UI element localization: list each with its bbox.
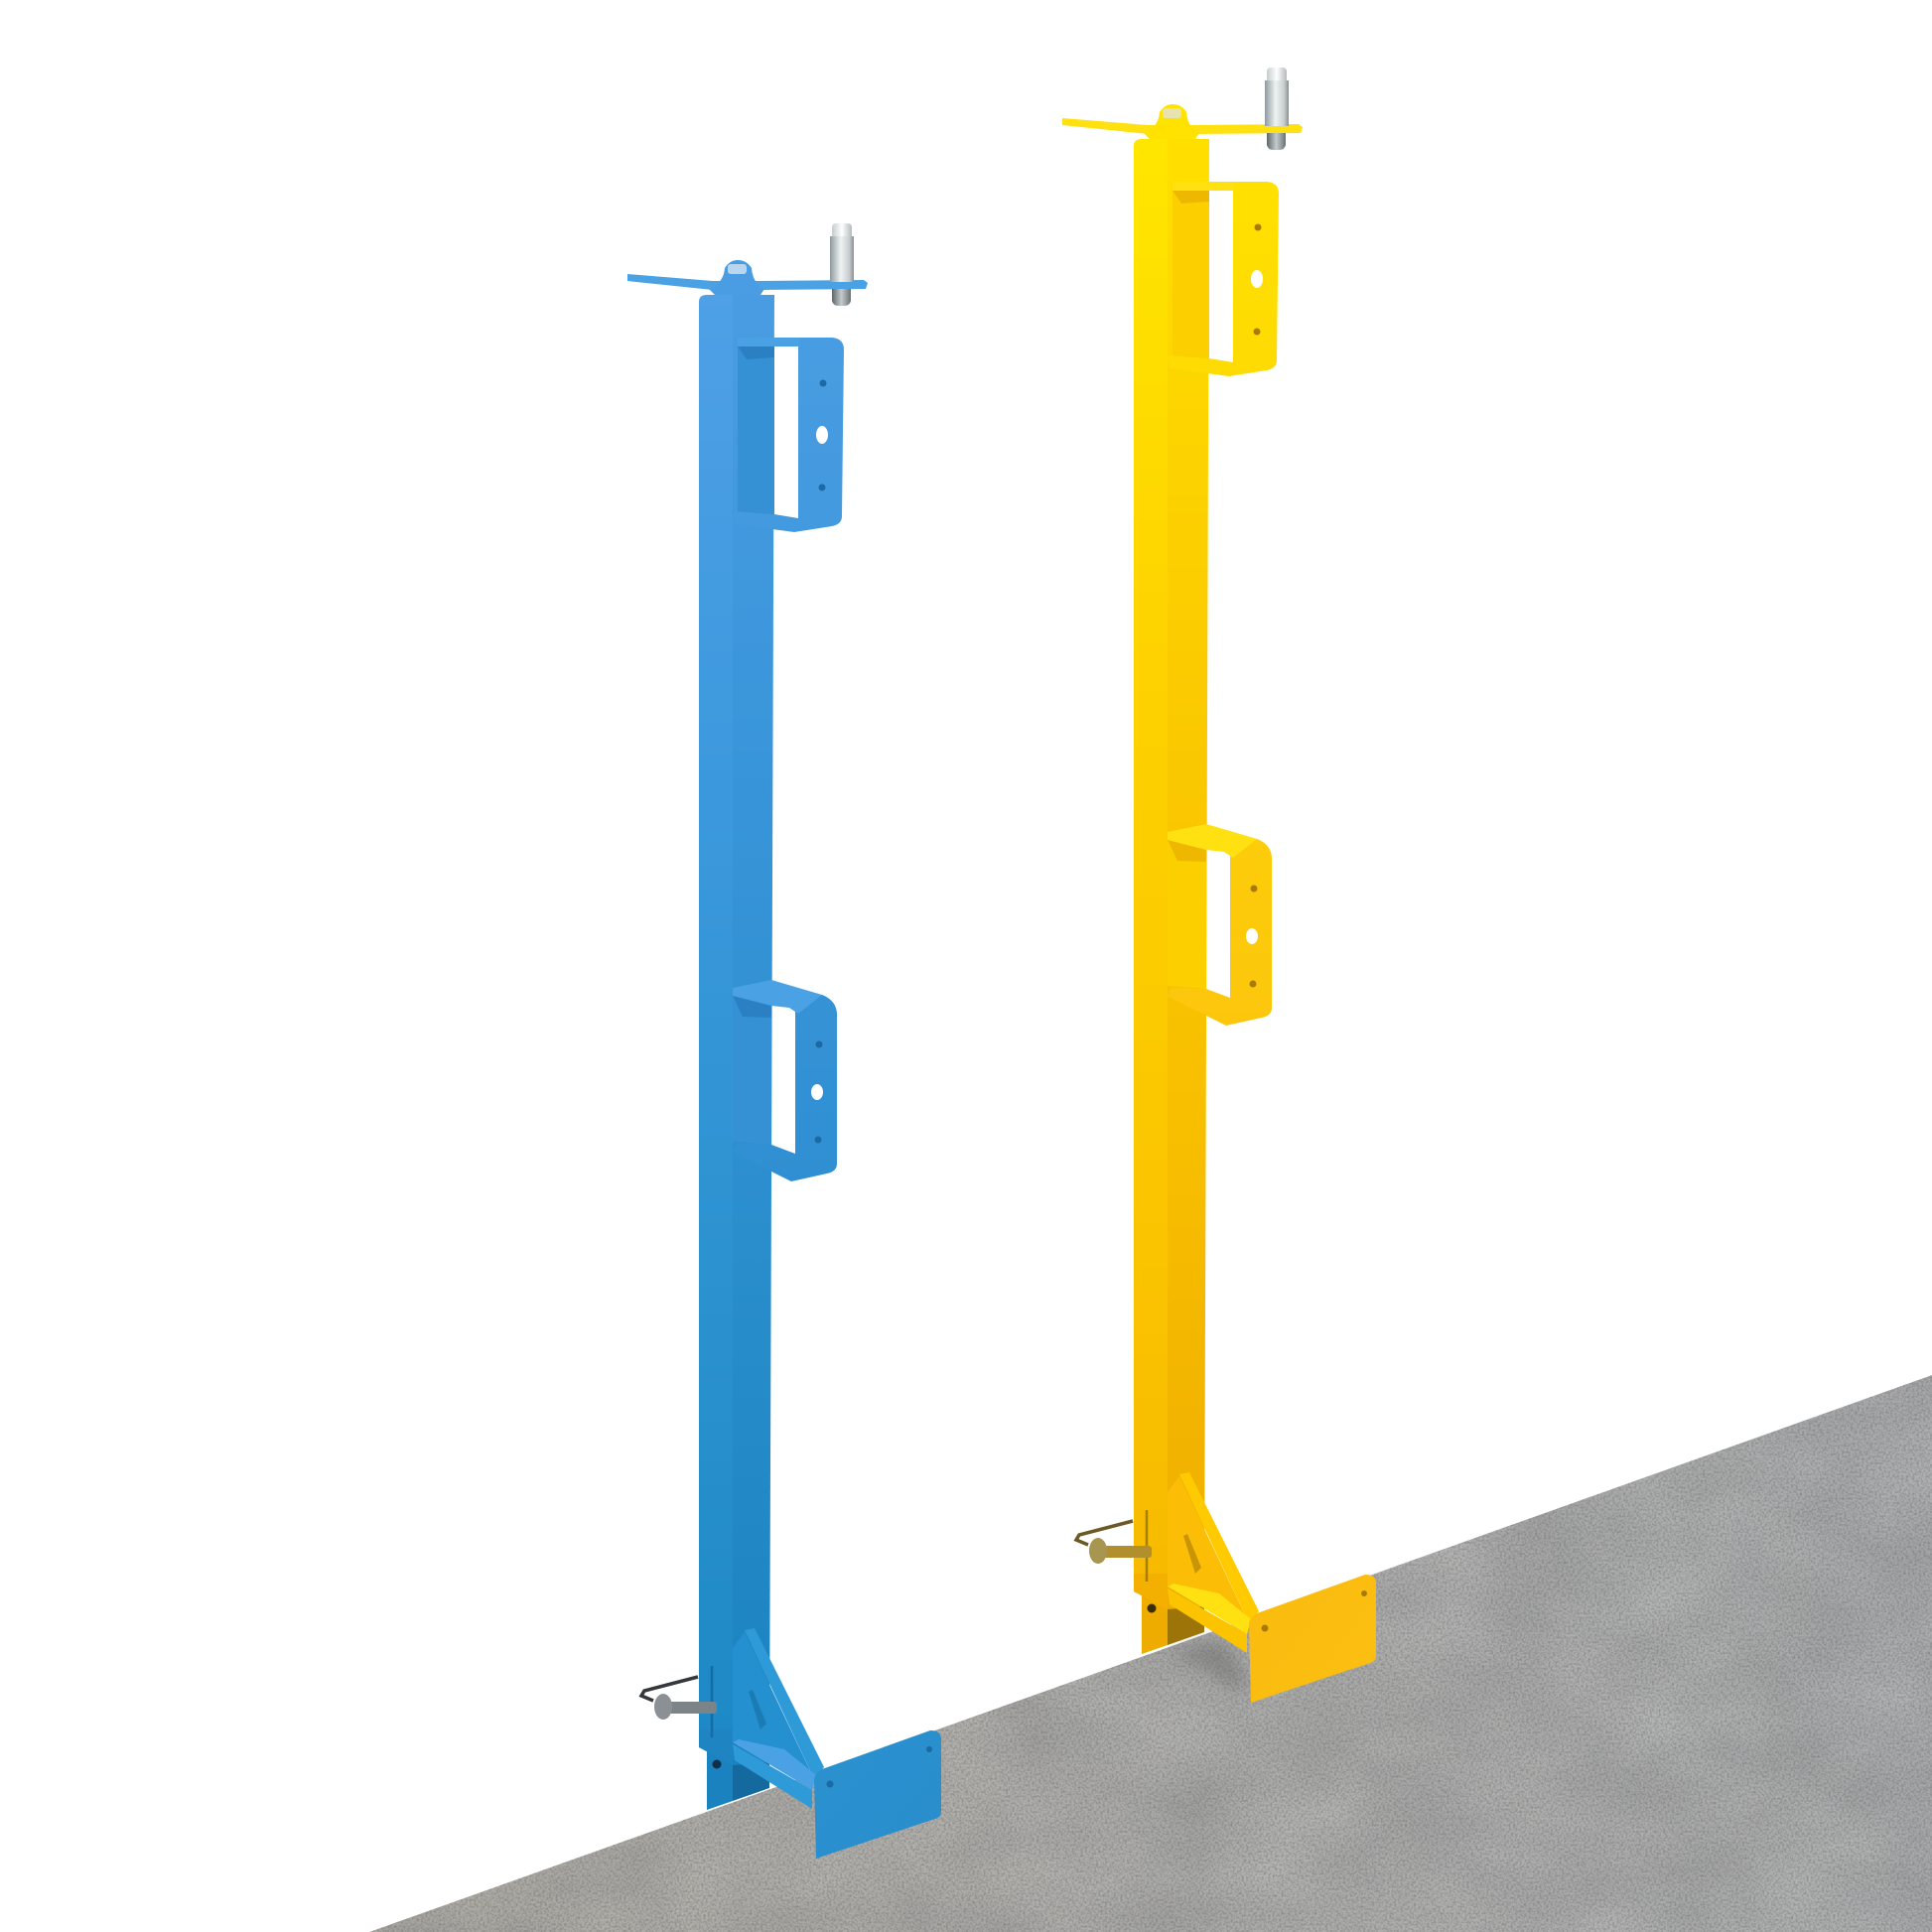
lock pin bbox=[641, 1677, 717, 1720]
post shaft bbox=[1134, 139, 1209, 1609]
shadow under yellow foot bbox=[1172, 1638, 1246, 1693]
middle bracket bbox=[1167, 824, 1272, 1026]
foot plate bbox=[1249, 1575, 1376, 1703]
blue post assembly bbox=[627, 223, 941, 1859]
lock pin bbox=[1076, 1521, 1152, 1564]
foot assembly bbox=[1134, 1472, 1259, 1653]
middle bracket bbox=[732, 980, 837, 1181]
silver pin bbox=[1265, 68, 1289, 150]
swivel arm bbox=[1062, 104, 1303, 139]
concrete slab bbox=[369, 1375, 1932, 1932]
top bracket bbox=[1167, 182, 1279, 376]
bracket holes bbox=[811, 1040, 823, 1144]
post lower sleeve bbox=[1142, 1591, 1204, 1654]
foot assembly bbox=[699, 1628, 824, 1809]
yellow post assembly bbox=[1062, 68, 1376, 1703]
foot plate bbox=[814, 1730, 941, 1859]
bracket holes bbox=[1246, 886, 1258, 987]
post shaft bbox=[699, 295, 774, 1765]
silver pin bbox=[830, 223, 854, 306]
bracket holes bbox=[816, 379, 828, 490]
swivel arm bbox=[627, 260, 868, 295]
post lower sleeve bbox=[707, 1747, 769, 1810]
bracket holes bbox=[1251, 224, 1263, 336]
top bracket bbox=[732, 338, 844, 532]
